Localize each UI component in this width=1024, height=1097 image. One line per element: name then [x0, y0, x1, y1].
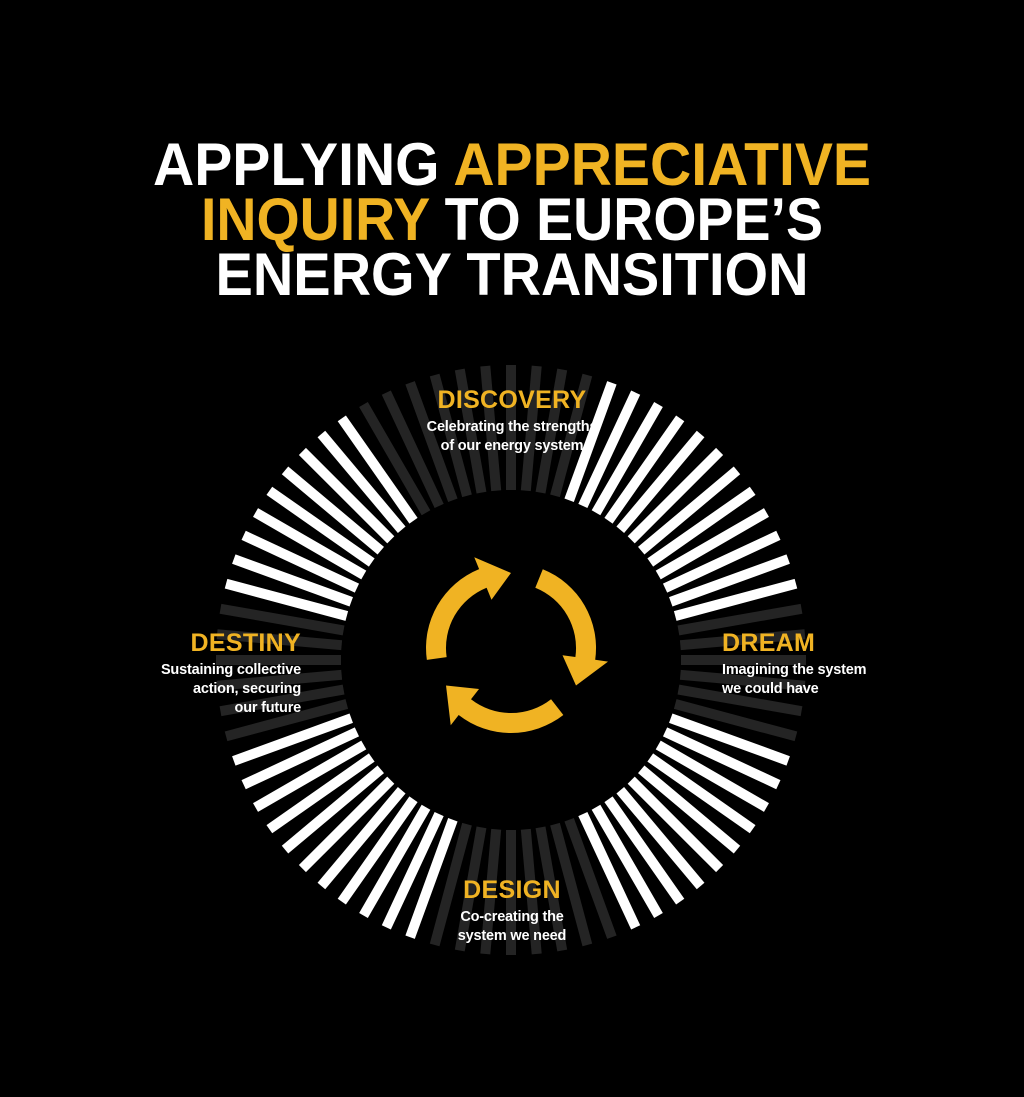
icon: cycle arrows: [426, 557, 608, 733]
label: dream: we could have: [722, 681, 819, 697]
title: [153, 131, 871, 308]
label: destiny: DESTINY: [191, 629, 301, 657]
label: destiny: Sustaining collective: [161, 662, 301, 678]
label: discovery: [427, 386, 597, 454]
label: destiny: our future: [235, 700, 301, 716]
title: ENERGY TRANSITION: [216, 241, 808, 308]
label: discovery: DISCOVERY: [437, 386, 587, 414]
label: design: DESIGN: [463, 876, 561, 904]
label: discovery: of our energy system: [441, 438, 583, 454]
label: design: Co-creating the: [460, 909, 564, 925]
label: dream: DREAM: [722, 629, 815, 657]
label: dream: [722, 629, 866, 697]
label: design: [458, 876, 566, 944]
title: APPLYING APPRECIATIVE: [153, 131, 871, 198]
label: destiny: action, securing: [193, 681, 301, 697]
label: destiny: [161, 629, 301, 716]
label: discovery: Celebrating the strengths: [427, 419, 597, 435]
label: dream: Imagining the system: [722, 662, 866, 678]
label: design: system we need: [458, 928, 566, 944]
title: INQUIRY TO EUROPE’S: [201, 186, 823, 253]
